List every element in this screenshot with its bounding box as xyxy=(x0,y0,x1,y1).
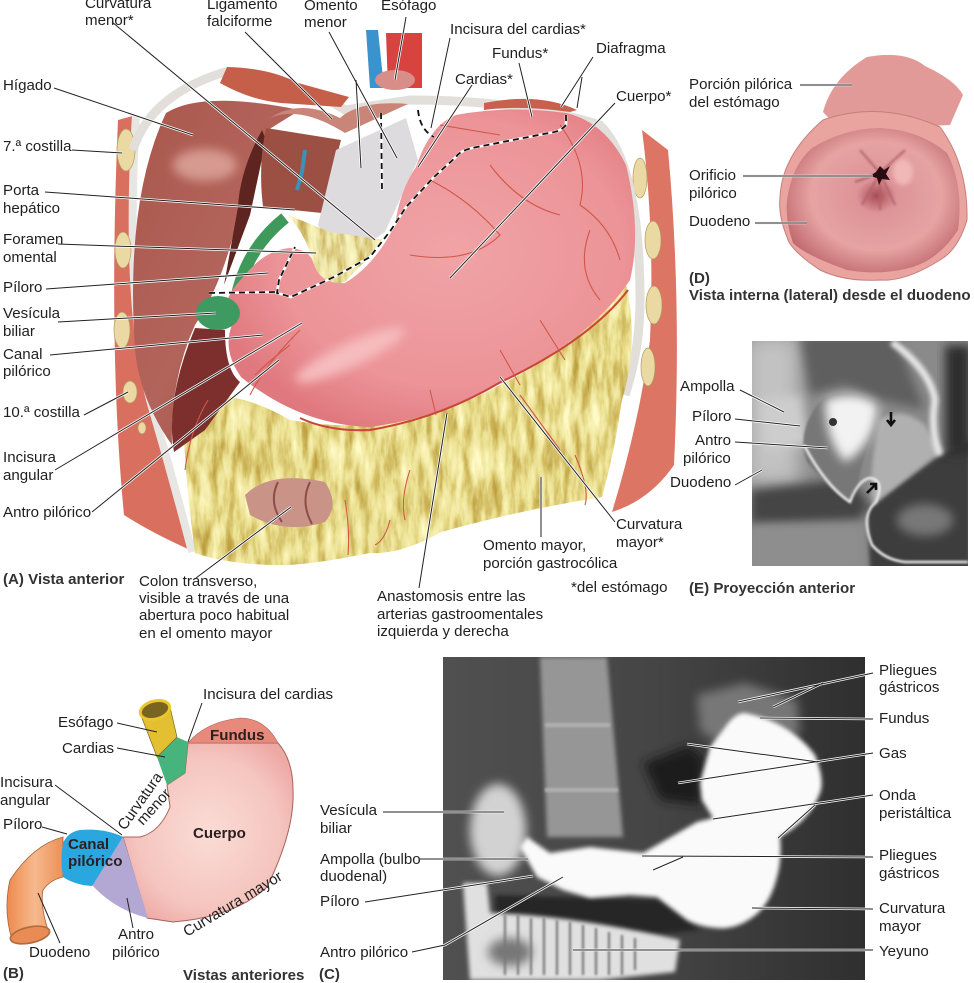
labels: panel C: (C) xyxy=(319,966,340,983)
pyloric portion tube xyxy=(823,55,963,130)
labels: panel A: Foramen xyxy=(3,231,63,248)
barium-filled stomach xyxy=(520,713,822,928)
cardia xyxy=(157,735,188,785)
upper dark field xyxy=(800,335,925,410)
labels: panel A: Cardias* xyxy=(455,71,513,88)
vertebral discs xyxy=(545,725,618,790)
labels: panel C: gástricos xyxy=(879,865,939,882)
labels: panel A: en el omento mayor xyxy=(139,625,272,642)
labels: panel B: Antro xyxy=(118,926,154,943)
aorta xyxy=(386,33,422,88)
diagram text: Curvatura mayor xyxy=(180,868,285,940)
labels: panel A: pilórico xyxy=(3,363,51,380)
labels: panel E: pilórico xyxy=(683,450,731,467)
liver left lobe xyxy=(261,128,341,213)
labels: panel C: peristáltica xyxy=(879,805,952,822)
labels: panel B: Cardias xyxy=(62,740,114,757)
liver right lobe xyxy=(133,101,300,445)
falciform fold xyxy=(270,103,408,133)
labels: panel A: Vesícula xyxy=(3,305,61,322)
leader lines: panel A xyxy=(45,17,615,588)
labels: panel A: Anastomosis entre las xyxy=(377,588,526,605)
labels: panel A: menor xyxy=(304,14,347,31)
diagram text: Curvatura xyxy=(114,769,167,833)
bright barium xyxy=(825,395,878,462)
right body wall xyxy=(612,130,677,512)
duodenal wall xyxy=(780,111,967,280)
labels: panel A: hepático xyxy=(3,200,60,217)
leader lines: panel D xyxy=(743,85,873,223)
labels: panel B: Píloro xyxy=(3,816,42,833)
labels: panel A: Canal xyxy=(3,346,42,363)
diaphragm muscle right xyxy=(484,99,577,112)
barium outline xyxy=(804,445,968,562)
leader lines: panel E xyxy=(735,390,828,485)
panel: D internal view from duodenum xyxy=(780,55,967,280)
left body wall xyxy=(114,115,190,550)
panel: A anterior view illustration xyxy=(114,30,677,565)
dashed stomach outline xyxy=(209,110,566,297)
esophagus xyxy=(140,707,177,757)
lesser omentum xyxy=(318,118,418,262)
diagram text: Cuerpo xyxy=(193,825,246,842)
antrum shape xyxy=(803,392,880,502)
fat of lesser curvature xyxy=(288,215,385,290)
transverse colon xyxy=(245,478,332,527)
labels: panel B: pilórico xyxy=(112,944,160,961)
esophagus cut end xyxy=(375,70,415,90)
labels: panel E: Píloro xyxy=(692,408,731,425)
arrow small upper xyxy=(887,412,895,425)
labels: panel C: mayor xyxy=(879,918,921,935)
diaphragm muscle left xyxy=(220,67,349,107)
fundus xyxy=(188,718,278,743)
pale folds xyxy=(893,159,913,185)
labels: panel C: Pliegues xyxy=(879,662,937,679)
great vessels xyxy=(366,30,384,88)
duodenum xyxy=(7,837,63,940)
labels: panel D: (D) xyxy=(689,270,710,287)
labels: panel A: *del estómago xyxy=(571,579,668,596)
labels: panel A: Curvatura xyxy=(616,516,683,533)
labels: panel B: Incisura xyxy=(0,774,53,791)
labels: panel A: Incisura xyxy=(3,449,56,466)
labels: panel A: Porta xyxy=(3,182,40,199)
labels: panel A: 10.ª costilla xyxy=(3,404,81,421)
stomach xyxy=(226,109,635,427)
greater omentum xyxy=(182,280,632,565)
labels: panel A: Píloro xyxy=(3,279,42,296)
labels: panel C: biliar xyxy=(320,820,352,837)
labels: panel C: Gas xyxy=(879,745,907,762)
bubble xyxy=(829,418,837,426)
labels: panel C: Ampolla (bulbo xyxy=(320,851,421,868)
labels: panel C: Pliegues xyxy=(879,847,937,864)
labels: panel C: Fundus xyxy=(879,710,929,727)
jejunum folds xyxy=(505,915,635,975)
labels: panel B: Esófago xyxy=(58,714,113,731)
labels: panel C xyxy=(319,662,952,983)
leader lines: panel B xyxy=(38,703,202,943)
hepatic vessels xyxy=(297,150,305,190)
labels: panel E: Ampolla xyxy=(680,378,735,395)
labels: panel D: Orificio xyxy=(689,167,736,184)
labels: panel C: Antro pilórico xyxy=(320,944,408,961)
jejunum xyxy=(463,883,680,980)
liver cavity xyxy=(172,328,240,452)
labels: panel E: (E) Proyección anterior xyxy=(689,580,855,597)
labels: panel B: angular xyxy=(0,792,50,809)
mucosal folds xyxy=(855,150,905,210)
labels: panel A: biliar xyxy=(3,323,35,340)
labels: panel D: Vista interna (lateral) desde el duodeno xyxy=(689,287,971,304)
colon haustra xyxy=(274,482,312,524)
dark band xyxy=(750,478,870,525)
diagram text xyxy=(68,727,285,940)
labels: panel B: (B) xyxy=(3,965,24,982)
lower left field xyxy=(752,520,852,532)
labels: panel B xyxy=(0,686,333,983)
dark band below stomach xyxy=(495,895,700,935)
greater curvature artery xyxy=(300,290,628,430)
labels: panel A: omental xyxy=(3,249,57,266)
fundus folds xyxy=(697,683,800,745)
labels: panel A: angular xyxy=(3,467,53,484)
labels: panel D xyxy=(689,76,971,304)
diagram text: pilórico xyxy=(68,853,123,870)
labels: panel A: Omento mayor, xyxy=(483,537,586,554)
labels: panel D: Porción pilórica xyxy=(689,76,793,93)
labels: panel A: menor* xyxy=(85,12,134,29)
labels: panel C: duodenal) xyxy=(320,868,387,885)
duodenum opening xyxy=(9,923,51,947)
body of stomach xyxy=(123,743,293,922)
leader lines: panel C xyxy=(365,673,873,952)
labels: panel A: Fundus* xyxy=(492,45,548,62)
jejunal core xyxy=(488,938,532,966)
arrow small lower xyxy=(867,484,876,493)
labels: panel B: Duodeno xyxy=(29,944,90,961)
labels: panel C: Onda xyxy=(879,787,917,804)
labels: panel A: arterias gastroomentales xyxy=(377,606,543,623)
diagram text: menor xyxy=(133,785,175,829)
diagram text: Fundus xyxy=(210,727,264,744)
pyloric orifice xyxy=(870,166,890,185)
labels: panel A: falciforme xyxy=(207,13,272,30)
left light field xyxy=(745,335,800,485)
labels: panel A: Colon transverso, xyxy=(139,573,257,590)
gallbladder duct xyxy=(236,218,285,300)
labels: panel A: (A) Vista anterior xyxy=(3,571,124,588)
labels: panel B: Incisura del cardias xyxy=(203,686,333,703)
duodenal bulb xyxy=(760,395,808,450)
gastric highlight xyxy=(291,319,409,391)
costal cartilages xyxy=(114,129,662,434)
gas pocket xyxy=(643,745,705,805)
labels: panel E: Antro xyxy=(695,432,731,449)
labels: panel C: Píloro xyxy=(320,893,359,910)
labels: panel C: Curvatura xyxy=(879,900,946,917)
labels: panel A: mayor* xyxy=(616,534,664,551)
labels: panel A: visible a través de una xyxy=(139,590,290,607)
duodenal lumen xyxy=(787,128,960,272)
peritoneal rim xyxy=(133,72,640,395)
gallbladder shadow xyxy=(470,784,526,876)
labels: panel C: gástricos xyxy=(879,679,939,696)
panel: E radiograph anterior projection xyxy=(745,335,971,570)
labels: panel A: Antro pilórico xyxy=(3,504,91,521)
panel: B stomach diagram xyxy=(7,697,293,947)
diagram text: Canal xyxy=(68,836,109,853)
gastric branches xyxy=(185,125,620,555)
antrum xyxy=(92,837,148,918)
labels: panel D: pilórico xyxy=(689,185,737,202)
labels: panel E xyxy=(670,378,855,597)
lower stomach xyxy=(872,414,940,505)
pyloric canal xyxy=(62,830,123,886)
labels: panel A: Cuerpo* xyxy=(616,88,672,105)
panel: C radiograph xyxy=(443,657,865,980)
spine xyxy=(540,657,623,837)
gallbladder xyxy=(196,296,240,330)
labels: panel D: del estómago xyxy=(689,94,780,111)
stringy right contrast xyxy=(892,342,940,455)
left wall inner rim xyxy=(133,115,192,552)
labels: panel A: porción gastrocólica xyxy=(483,555,618,572)
labels: panel A: 7.ª costilla xyxy=(3,138,72,155)
right dark xyxy=(945,345,971,455)
lower right mottled field xyxy=(867,440,970,570)
labels: panel C: Vesícula xyxy=(320,802,378,819)
liver shadow xyxy=(224,130,266,285)
labels: panel A: Incisura del cardias* xyxy=(450,21,586,38)
labels: panel A: izquierda y derecha xyxy=(377,623,509,640)
labels: panel A: abertura poco habitual xyxy=(139,607,289,624)
labels: panel D: Duodeno xyxy=(689,213,750,230)
labels: panel E: Duodeno xyxy=(670,474,731,491)
labels: panel A xyxy=(3,0,683,642)
esophagus opening xyxy=(138,697,172,723)
lighter mottling xyxy=(897,504,953,536)
labels: panel C: Yeyuno xyxy=(879,943,929,960)
labels: panel A: Diafragma xyxy=(596,40,666,57)
liver highlight xyxy=(173,149,237,181)
labels: panel A: Hígado xyxy=(3,77,52,94)
